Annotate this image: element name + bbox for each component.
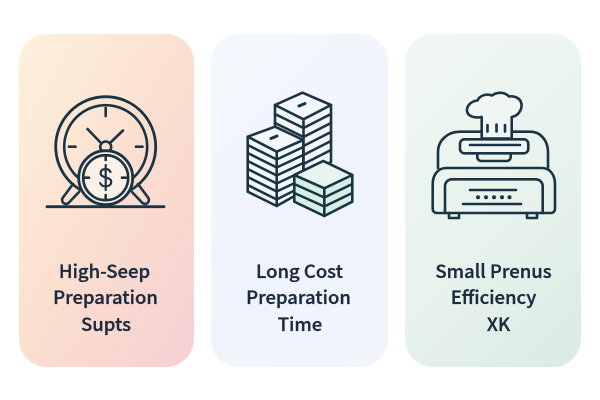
text: card 2 label: Time	[278, 310, 322, 336]
chef hat	[467, 93, 522, 138]
panel: long cost preparation time	[211, 34, 388, 367]
panel: preparation supts	[19, 34, 194, 367]
text: card 1 label: Preparation	[53, 284, 158, 310]
text: card 1 label	[53, 258, 158, 336]
text: card 2 label	[246, 258, 351, 336]
text: card 3 label: XK	[487, 310, 510, 336]
icon: stacks of coins	[248, 93, 352, 216]
icon: clock with dollar coin	[47, 97, 164, 207]
back stack	[275, 93, 331, 175]
text: card 2 label: Long Cost	[256, 258, 343, 284]
small green stack	[294, 161, 352, 216]
icon: chef hat on oven	[433, 93, 555, 218]
text: card 3 label: Small Prenus	[435, 258, 552, 284]
oven top	[438, 132, 548, 168]
slot	[460, 139, 528, 153]
panel: small prenus efficiency	[405, 34, 581, 367]
text: card 3 label	[435, 258, 552, 336]
text: card 1 label: Supts	[81, 310, 131, 336]
text: card 1 label: High-Seep	[59, 258, 150, 284]
text: card 2 label: Preparation	[246, 284, 351, 310]
text: card 3 label: Efficiency	[451, 284, 536, 310]
oven base	[433, 168, 555, 213]
front left stack	[248, 127, 303, 206]
